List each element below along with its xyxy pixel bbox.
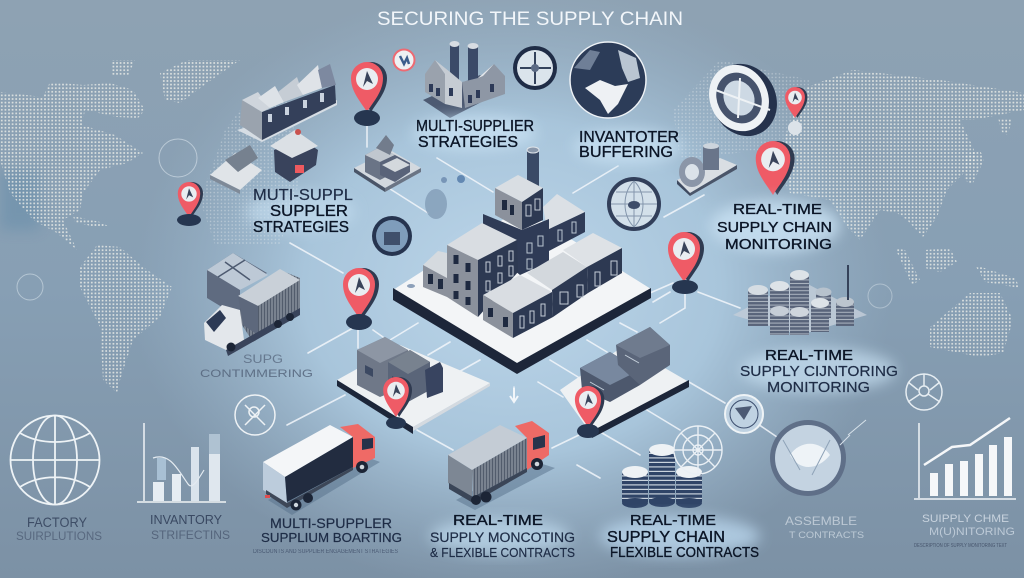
label: inventory strategies: STRIFECTINS <box>151 528 230 542</box>
title: SECURING THE SUPPLY CHAIN <box>377 9 683 30</box>
icon: faint orbs <box>425 175 465 219</box>
label: real-time supply monitoring and flexible contracts: SUPPLY MONCOTING <box>430 530 575 545</box>
label: real-time supply chain flexible contracts: FLEXIBLE CONTRACTS <box>610 545 759 561</box>
map: Indonesia <box>895 248 920 285</box>
platform <box>393 208 651 374</box>
label: assemble (faded) <box>785 514 864 540</box>
label: supply chain monitoring (right) <box>914 513 1015 549</box>
far left block <box>423 251 447 297</box>
label: real-time supply monitoring: SUPPLY CIJNTORING <box>740 364 898 380</box>
label: factory suppliers: SUIRPLUTIONS <box>16 531 102 543</box>
icon: small device right <box>677 143 737 196</box>
central factory <box>393 147 651 374</box>
label: real-time supply chain flexible contracts: SUPPLY CHAIN <box>607 529 725 546</box>
icon: magnifier lens <box>770 420 866 496</box>
mid block <box>527 252 588 317</box>
connector lines <box>287 125 777 478</box>
icon: target dial <box>698 53 789 147</box>
label: real-time supply chain monitoring (top right): REAL-TIME <box>733 201 822 218</box>
label: inventory buffering: INVANTOTER <box>579 129 679 146</box>
label: multi-supplier strategies (left): STRATEGIES <box>253 219 349 236</box>
label: real-time supply chain monitoring (top right): SUPPLY CHAIN <box>717 219 832 236</box>
chart: left bar chart <box>137 423 226 502</box>
map: Arctic islands <box>112 60 135 76</box>
label: supply monitoring (faint left): CONTIMMERING <box>200 368 313 380</box>
label: multi-supplier strategies (left): SUPPLER <box>270 203 348 220</box>
icon: radial target <box>674 426 722 474</box>
label: factory suppliers <box>16 514 102 543</box>
icon: large globe <box>570 42 646 118</box>
icon: ring outline bottom left <box>235 395 275 435</box>
label: real-time supply monitoring: REAL-TIME <box>765 347 853 364</box>
label: real-time supply monitoring <box>740 347 898 396</box>
icon: upper left factory <box>237 64 337 142</box>
rear right block <box>543 194 585 252</box>
icon: small red badge <box>394 50 414 70</box>
label: real-time supply monitoring: MONITORING <box>767 380 870 396</box>
icon: south west crates platform <box>337 337 490 434</box>
label: inventory buffering <box>574 129 682 164</box>
label: supply chain monitoring (right): M(U)NITORING <box>929 526 1015 538</box>
label: real-time supply chain flexible contracts: REAL-TIME <box>630 512 716 529</box>
icon: small crates platform <box>354 135 421 192</box>
left block <box>447 223 518 317</box>
map: New Guinea <box>975 265 1020 288</box>
map: Australia <box>930 293 1013 357</box>
label: factory suppliers: FACTORY <box>27 514 88 530</box>
map ornament: round icon <box>17 274 43 300</box>
pin: west small <box>177 182 203 226</box>
icon: coin stacks on plate <box>733 265 867 335</box>
label: multi-supplier sourcing <box>253 516 402 555</box>
label: multi-supplier strategies (left): MUTI-SUPPL <box>253 187 353 204</box>
map ornament: thin circle <box>159 139 197 177</box>
map: Asia <box>780 70 1024 240</box>
chimney <box>527 147 539 188</box>
label: multi-supplier sourcing: SUPPLIUM BOARTING <box>261 531 402 545</box>
icon: bottom centre truck <box>448 421 555 510</box>
map: Japan <box>965 150 984 185</box>
label: supply monitoring (faint left) <box>200 352 313 380</box>
pin: north east large <box>756 141 795 195</box>
icon: bottom left red truck <box>263 424 380 515</box>
pin: north centre <box>351 62 387 126</box>
icon: small globe in circle <box>607 177 661 231</box>
label: inventory strategies <box>150 512 230 542</box>
label: real-time supply chain monitoring (top right): MONITORING <box>725 236 832 253</box>
icon: south east crates platform <box>560 327 689 438</box>
label: inventory strategies: INVANTORY <box>150 512 222 527</box>
icon: top center factory with chimneys <box>423 41 505 118</box>
label: supply monitoring (faint left): SUPG <box>243 352 283 366</box>
front block <box>483 275 553 338</box>
icon: small direction badge <box>725 395 763 433</box>
icon: navy coin stacks <box>622 444 702 508</box>
map: Kamchatka <box>998 118 1012 135</box>
middle tower core <box>483 214 549 275</box>
label: multi-supplier strategies (top): STRATEGIES <box>418 134 518 151</box>
label: multi-supplier strategies (top): MULTI-SUPPLIER <box>416 118 534 135</box>
label: real-time supply chain monitoring (top right) <box>710 200 840 253</box>
dotted world map <box>0 60 1024 393</box>
pin: south east <box>575 386 604 438</box>
label: multi-supplier sourcing: DISCOUNTS AND SUPPLIER ENGAGEMENT STRATEGIES <box>253 549 398 555</box>
map: Asia west fringe <box>673 60 810 193</box>
label: real-time supply monitoring and flexible contracts: REAL-TIME <box>453 513 543 529</box>
label: supply chain monitoring (right): SUIPPLY CHME <box>922 513 1009 525</box>
label: real-time supply chain flexible contracts <box>600 512 760 561</box>
pin: east <box>668 232 704 294</box>
icon: outline wheel right <box>906 374 942 410</box>
map: Greenland and Arctic <box>160 60 240 103</box>
label: multi-supplier strategies (left) <box>245 187 355 236</box>
map: Europe fringe <box>200 100 300 245</box>
label: multi-supplier strategies (top) <box>413 116 537 151</box>
icon: left truck and crates <box>204 253 300 356</box>
icon: compass <box>513 46 557 90</box>
map: Caribbean <box>73 216 110 227</box>
pin: small north east <box>785 87 807 135</box>
icon: small globe badge left <box>372 216 412 256</box>
label: real-time supply monitoring and flexible contracts <box>430 513 575 560</box>
map: Borneo and Sumatra <box>925 248 957 272</box>
right block <box>563 233 622 293</box>
map: North America <box>0 82 145 250</box>
icon: left outline globe <box>10 415 100 505</box>
map: South America <box>80 245 172 393</box>
label: multi-supplier sourcing: MULTI-SPUPPLER <box>270 516 392 531</box>
icon: small warehouse machine <box>210 129 318 194</box>
top tower <box>495 175 543 230</box>
pin: south <box>383 377 412 429</box>
chart: right bars and trend line <box>914 418 1016 499</box>
label: assemble (faded): ASSEMBLE <box>785 514 857 528</box>
label: real-time supply monitoring and flexible contracts: & FLEXIBLE CONTRACTS <box>430 545 575 560</box>
map ornament: right outline <box>868 284 892 308</box>
label: assemble (faded): T CONTRACTS <box>789 530 864 540</box>
pin: west centre <box>343 268 379 330</box>
icon: small down arrow <box>510 388 518 402</box>
label: inventory buffering: BUFFERING <box>579 144 673 161</box>
